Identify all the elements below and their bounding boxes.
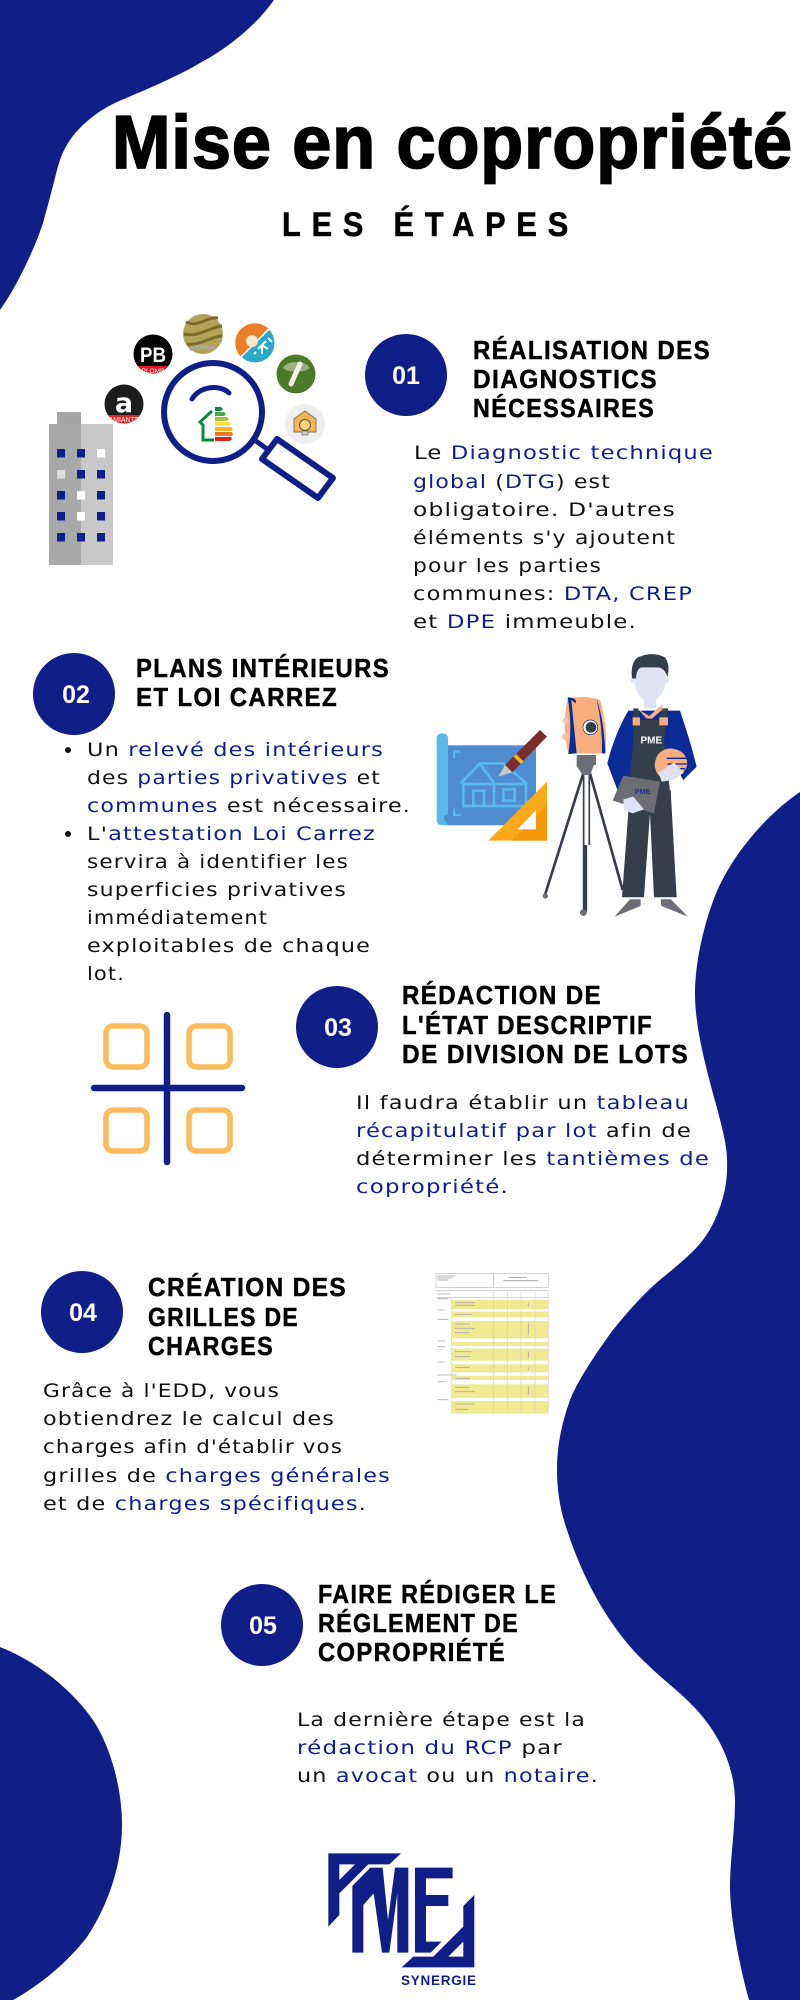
body 05: La dernière étape est la (297, 1709, 586, 1731)
icon: lead badge (134, 334, 172, 375)
helmet (655, 748, 687, 780)
tripod (543, 765, 623, 916)
arms and shirt (607, 711, 697, 797)
face (634, 663, 666, 708)
bullets 02 (65, 739, 411, 985)
bullets 02: lot. (87, 963, 125, 985)
body 03: déterminer les tantièmes de (356, 1148, 710, 1170)
body 05: rédaction du RCP par (297, 1737, 563, 1759)
body 03 (356, 1092, 710, 1198)
number badge 01: 01 (392, 362, 420, 390)
number badge 03 (296, 986, 378, 1068)
number badge 02 (33, 653, 115, 735)
heading 02: ET LOI CARREZ (136, 682, 338, 712)
heading 01: RÉALISATION DES (473, 335, 711, 365)
collar (638, 705, 663, 719)
body 03: copropriété . (356, 1176, 509, 1198)
bullets 02: immédiatement (87, 907, 268, 929)
heading 02 (136, 653, 390, 712)
heading 05: FAIRE RÉDIGER LE (318, 1579, 557, 1609)
body 04: grilles de charges générales (43, 1465, 391, 1487)
bullets 02: des parties privatives et (87, 767, 381, 789)
heading 04: CRÉATION DES (148, 1272, 347, 1302)
step 05 (221, 1579, 599, 1787)
icon: lots grid (94, 1015, 242, 1162)
blob: bottom left (0, 1647, 122, 2000)
body 05: un avocat ou un notaire . (297, 1765, 599, 1787)
illustration: diagnostics (49, 314, 333, 565)
number badge 03: 03 (324, 1014, 352, 1042)
step 01 (365, 334, 714, 633)
icon: sun and snow badge (235, 323, 274, 362)
heading 03: L'ÉTAT DESCRIPTIF (402, 1010, 653, 1040)
body 05 (297, 1709, 599, 1787)
number badge 04: 04 (69, 1299, 97, 1327)
bullets 02: L'attestation Loi Carrez (87, 823, 376, 845)
heading 02: PLANS INTÉRIEURS (136, 653, 390, 683)
body 03: Il faudra établir un tableau (356, 1092, 690, 1114)
heading 05: COPROPRIÉTÉ (318, 1637, 506, 1667)
icon: asbestos badge: a (115, 388, 133, 419)
bullets 02: communes est nécessaire. (87, 795, 411, 817)
heading 01: DIAGNOSTICS (473, 364, 658, 394)
number badge 01 (365, 334, 447, 416)
logo on bib: PME (640, 735, 662, 746)
body 01: Le Diagnostic technique (414, 442, 714, 464)
body 01: obligatoire. D'autres (413, 499, 676, 521)
bullets 02: servira à identifier les (87, 851, 349, 873)
illustration: surveyor with scanner: PME (635, 787, 651, 796)
icon: bulb badge (285, 404, 325, 444)
number badge 04 (41, 1271, 123, 1353)
number badge 02: 02 (62, 681, 90, 709)
image: charges table (436, 1273, 548, 1415)
heading 04: CHARGES (148, 1331, 274, 1361)
illustration: blueprint (437, 730, 547, 841)
icon: energy label house (199, 407, 233, 441)
icon: building (49, 412, 113, 565)
number badge 05 (221, 1584, 303, 1666)
step 04 (41, 1271, 548, 1515)
hand left (623, 797, 644, 813)
step 03 (94, 980, 710, 1198)
body 04: obtiendrez le calcul des (43, 1408, 335, 1430)
body 01: pour les parties (413, 555, 602, 577)
body 01: global (DTG ) est (413, 471, 611, 493)
shoes (615, 899, 688, 917)
heading 04: GRILLES DE (148, 1302, 299, 1332)
number badge 05: 05 (249, 1612, 277, 1640)
icon: asbestos badge: AMIANTE (108, 417, 140, 424)
body 01 (413, 442, 714, 633)
heading 01 (473, 335, 711, 423)
logo: PME Synergie: SYNERGIE (401, 1973, 476, 1988)
bullets 02: Un relevé des intérieurs (87, 739, 384, 761)
body 04: charges afin d'établir vos (43, 1436, 343, 1458)
heading 03 (402, 980, 689, 1069)
illustration: surveyor with scanner (543, 654, 697, 917)
heading 04 (148, 1272, 347, 1361)
icon: lead badge: PB (140, 344, 166, 367)
heading 01: NÉCESSAIRES (473, 393, 655, 423)
body 01: communes: DTA, CREP (413, 583, 693, 605)
body 04 (43, 1380, 391, 1515)
blob: top left (0, 0, 274, 310)
tablet (613, 776, 660, 813)
hand right (659, 763, 684, 782)
heading 05: RÉGLEMENT DE (318, 1608, 519, 1638)
hair (632, 654, 669, 678)
body 03: récapitulatif par lot afin de (356, 1120, 692, 1142)
heading 05 (318, 1579, 557, 1667)
blob: right side (557, 792, 800, 2000)
overalls (628, 708, 671, 797)
heading 03: DE DIVISION DE LOTS (402, 1039, 689, 1069)
body 01: et DPE immeuble. (413, 611, 637, 633)
body 01: éléments s'y ajoutent (413, 527, 676, 549)
icon: magnifying glass (164, 363, 333, 498)
body 04: Grâce à l'EDD, vous (43, 1380, 280, 1402)
icon: wood badge (183, 314, 223, 354)
bullets 02: exploitables de chaque (87, 935, 371, 957)
heading 03: RÉDACTION DE (402, 980, 602, 1010)
legs (622, 790, 677, 897)
subtitle: LES ÉTAPES (282, 206, 579, 244)
scanner (562, 697, 606, 765)
step 02 (33, 653, 697, 985)
icon: asbestos badge (104, 384, 144, 424)
icon: termite badge (276, 354, 316, 394)
bullets 02: superficies privatives (87, 879, 347, 901)
icon: lead badge: PLOMB (142, 368, 164, 375)
logo: PME Synergie (328, 1853, 476, 1988)
body 04: et de charges spécifiques . (43, 1493, 367, 1515)
